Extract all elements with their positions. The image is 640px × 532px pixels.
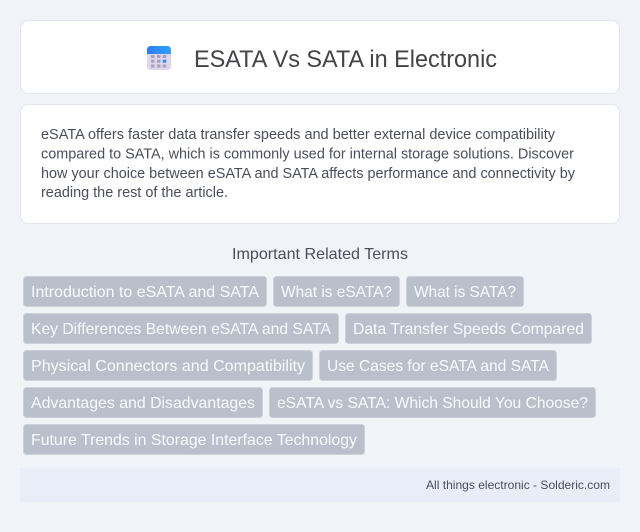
header card [20,20,620,94]
chip: key differences: Key Differences Between eSATA and SATA [31,321,331,338]
chip: what is SATA [406,276,524,306]
chip: advantages [24,388,262,418]
chip: data transfer speeds [346,314,592,344]
chip: data transfer speeds: Data Transfer Speeds Compared [353,321,584,338]
chip: which to choose [270,388,596,418]
chip: introduction [24,276,266,306]
chip: physical connectors [24,350,312,380]
panel: intro paragraph: reading the rest of the article. [41,185,228,201]
title: ESATA Vs SATA in Electronic [194,46,497,73]
chip: future trends: Future Trends in Storage Interface Technology [31,432,357,449]
chip: use cases: Use Cases for eSATA and SATA [327,358,549,375]
chip: use cases [320,350,556,380]
chip: what is SATA: What is SATA? [414,284,516,301]
chip: introduction: Introduction to eSATA and SATA [31,284,259,301]
footer: All things electronic - Solderic.com [426,478,610,492]
panel: intro paragraph [20,104,620,224]
panel: intro paragraph: eSATA offers faster data transfer speeds and better external device compatibility [41,127,556,143]
icon: calendar [147,46,171,70]
panel: intro paragraph: compared to SATA, which is commonly used for internal storage solutions. Discover [41,146,574,162]
chip: what is eSATA: What is eSATA? [281,284,392,301]
chip: key differences [24,314,338,344]
chip: which to choose: eSATA vs SATA: Which Should You Choose? [277,395,588,412]
heading: related terms: Important Related Terms [232,246,408,263]
chip: physical connectors: Physical Connectors and Compatibility [31,358,305,375]
term chips [24,276,596,454]
footer [20,468,620,502]
chip: future trends [24,424,364,454]
panel: intro paragraph: how your choice between eSATA and SATA affects performance and connectivity by [41,166,576,182]
chip: what is eSATA [274,276,400,306]
chip: advantages: Advantages and Disadvantages [31,395,255,412]
